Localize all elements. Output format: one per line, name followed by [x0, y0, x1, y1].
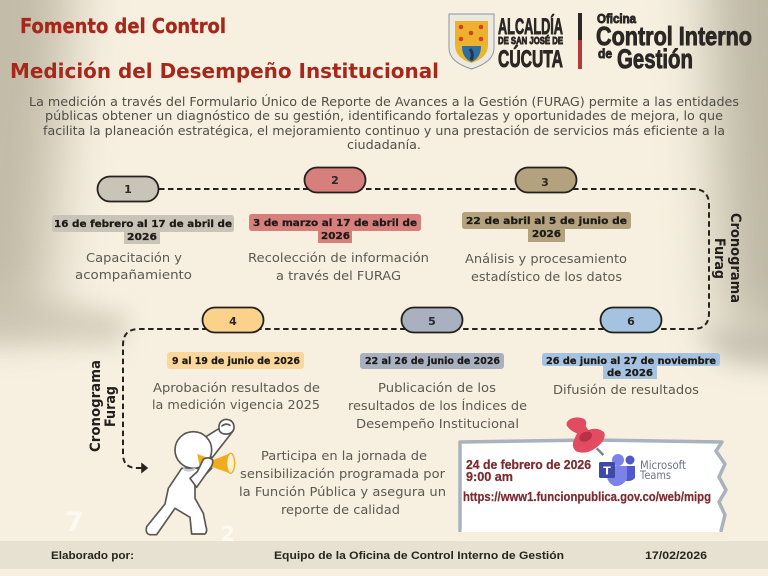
- step 6: de 2026: [607, 368, 653, 379]
- decorative numbers: [65, 507, 235, 546]
- step 4: Aprobación resultados de: [153, 380, 320, 395]
- logo text: Alcaldía: [498, 14, 563, 73]
- step 5: [348, 308, 527, 431]
- step 6: 26 de junio al 27 de noviembre: [546, 356, 716, 367]
- icon: person with megaphone: [146, 419, 235, 535]
- step 5: Desempeño Institucional: [356, 416, 519, 431]
- intro paragraph: públicas obtener un diagnóstico de su gestión, identificando fortalezas y oportunidades de mejora, lo que: [45, 108, 723, 123]
- step 2: [248, 168, 429, 283]
- step 2: 3 de marzo al 17 de abril de: [253, 218, 417, 229]
- intro paragraph: La medición a través del Formulario Único de Reporte de Avances a la Gestión (FURAG) permite a las entidades: [29, 94, 739, 109]
- logos block: [449, 11, 752, 74]
- step 6: [542, 308, 720, 397]
- step 1: 1: [124, 183, 132, 196]
- step 5: 5: [428, 315, 436, 328]
- step 2: a través del FURAG: [276, 268, 401, 283]
- logo text: Oficina: [596, 11, 752, 74]
- decorative numbers: 2: [221, 522, 235, 546]
- icon: city shield: [449, 14, 494, 69]
- vertical label right: [711, 213, 743, 303]
- step 5: resultados de los Índices de: [348, 398, 527, 413]
- icon: Teams logo: T: [603, 464, 611, 478]
- arrow head: [142, 464, 147, 472]
- header title: Fomento del Control: [20, 14, 226, 38]
- footer band: 17/02/2026: [645, 550, 707, 562]
- participation text: reporte de calidad: [281, 502, 400, 517]
- step 1: 16 de febrero al 17 de abril de: [54, 219, 232, 230]
- icon: Teams logo: [599, 454, 635, 486]
- microsoft teams label: Microsoft: [640, 458, 686, 472]
- participation text: la Función Pública y asegura un: [239, 484, 446, 499]
- footer band: [0, 541, 768, 569]
- vertical label left: Furag: [103, 386, 119, 427]
- date and time: 24 de febrero de 2026: [466, 457, 591, 472]
- step 4: 4: [229, 315, 237, 328]
- step 4: la medición vigencia 2025: [152, 397, 320, 412]
- logo text: Oficina: Oficina: [597, 11, 637, 26]
- footer band: Equipo de la Oficina de Control Interno de Gestión: [274, 550, 564, 562]
- intro paragraph: facilita la planeación estratégica, el mejoramiento continuo y una prestación de servicios más eficiente a la: [43, 123, 725, 138]
- logo text: Alcaldía: ALCALDÍA: [498, 14, 563, 39]
- footer band: Elaborado por:: [51, 550, 134, 562]
- microsoft teams label: Teams: [639, 468, 671, 482]
- step 3: [462, 168, 631, 284]
- participation text: sensibilización programada por: [240, 466, 446, 481]
- date and time: [466, 457, 591, 484]
- step 5: 22 al 26 de junio de 2026: [365, 356, 500, 367]
- vertical label right: Cronograma: [727, 213, 743, 303]
- main heading: Medición del Desempeño Institucional: [10, 59, 439, 83]
- step 1: 2026: [127, 232, 157, 243]
- step 5: Publicación de los: [378, 380, 496, 395]
- step 3: 2026: [532, 229, 561, 240]
- logo text: Alcaldía: CÚCUTA: [498, 45, 563, 73]
- logo text: Oficina: de: [598, 46, 612, 61]
- step 3: 22 de abril al 5 de junio de: [466, 216, 627, 227]
- date and time: 9:00 am: [466, 469, 513, 484]
- microsoft teams label: [639, 458, 686, 482]
- step 6: Difusión de resultados: [553, 382, 699, 397]
- step 4: 9 al 19 de junio de 2026: [172, 356, 300, 367]
- step 2: Recolección de información: [248, 250, 429, 265]
- step 4: [152, 308, 320, 412]
- logo text: Oficina: Gestión: [617, 44, 693, 74]
- decorative numbers: 7: [65, 507, 84, 538]
- dashed timeline path: [123, 189, 709, 468]
- step 3: estadístico de los datos: [471, 269, 622, 284]
- intro paragraph: [29, 94, 739, 152]
- participation text: Participa en la jornada de: [261, 448, 427, 463]
- vertical label right: Furag: [711, 238, 727, 279]
- note card: [458, 417, 728, 538]
- step 2: 2026: [321, 231, 350, 242]
- step 1: Capacitación y: [86, 250, 183, 265]
- step 6: 6: [627, 315, 635, 328]
- step 3: 3: [541, 176, 549, 189]
- vertical label left: Cronograma: [88, 360, 104, 452]
- vertical label left: [88, 360, 119, 452]
- logo text: Alcaldía: DE SAN JOSÉ DE: [498, 34, 563, 47]
- participation text: [239, 448, 446, 517]
- step 1: [52, 176, 234, 282]
- step 2: 2: [331, 174, 339, 187]
- intro paragraph: ciudadanía.: [347, 137, 421, 152]
- step 3: Análisis y procesamiento: [465, 251, 627, 266]
- url: https://www1.funcionpublica.gov.co/web/mipg: [463, 489, 711, 504]
- icon: red push pin: [566, 417, 605, 455]
- step 1: acompañamiento: [75, 267, 192, 282]
